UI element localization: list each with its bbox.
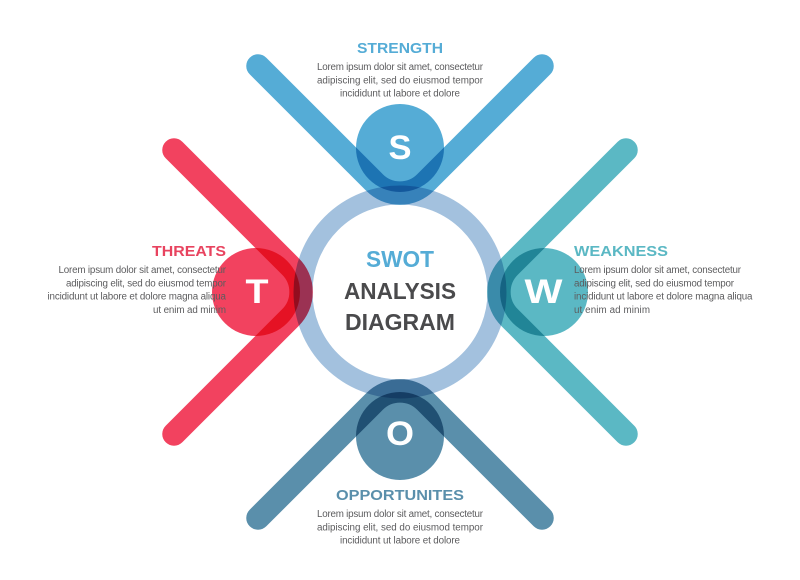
- opportunities V band: [258, 391, 542, 518]
- text block: strength: [317, 62, 484, 100]
- icon: letter T: T: [246, 273, 269, 311]
- title: analysis diagram: ANALYSIS: [344, 278, 456, 304]
- text block: threats: incididunt ut labore et dolore magna aliqua: [48, 292, 227, 303]
- threats circle: [212, 248, 300, 336]
- panel: opportunities graphic: [258, 391, 542, 518]
- opportunities circle: [356, 392, 444, 480]
- strength V band: [258, 66, 542, 193]
- text block: weakness: ut enim ad minim: [574, 305, 650, 316]
- threats V band: [174, 150, 301, 434]
- text block: strength: Lorem ipsum dolor sit amet, consectetur: [317, 62, 484, 73]
- heading: weakness: WEAKNESS: [574, 243, 668, 260]
- text block: weakness: incididunt ut labore et dolore magna aliqua: [574, 292, 753, 303]
- text block: strength: incididunt ut labore et dolore: [340, 88, 461, 100]
- text block: opportunities: adipiscing elit, sed do eiusmod tempor: [317, 522, 484, 534]
- text block: weakness: Lorem ipsum dolor sit amet, consectetur: [574, 265, 742, 276]
- heading: threats: THREATS: [152, 243, 226, 260]
- text block: threats: ut enim ad minim: [153, 305, 226, 316]
- title: analysis diagram: [344, 278, 456, 335]
- heading: SWOT: SWOT: [366, 246, 434, 272]
- icon: letter S: S: [388, 129, 412, 167]
- heading: opportunities: OPPORTUNITES: [336, 487, 464, 504]
- text block: opportunities: incididunt ut labore et dolore: [340, 536, 461, 546]
- heading: strength: STRENGTH: [357, 40, 443, 57]
- icon: letter O: O: [386, 415, 414, 453]
- text block: strength: adipiscing elit, sed do eiusmod tempor: [317, 76, 484, 86]
- icon: letter W: W: [524, 273, 564, 311]
- weakness V band: [499, 150, 626, 434]
- panel: strength graphic: [258, 66, 542, 193]
- weakness circle: [500, 248, 588, 336]
- text block: opportunities: [317, 509, 484, 546]
- text block: threats: adipiscing elit, sed do eiusmod tempor: [66, 278, 227, 289]
- central ring: [303, 195, 497, 389]
- text block: threats: [48, 265, 227, 316]
- strength circle: [356, 104, 444, 192]
- text block: opportunities: Lorem ipsum dolor sit amet, consectetur: [317, 509, 484, 520]
- text block: weakness: [574, 265, 753, 316]
- title: analysis diagram: DIAGRAM: [345, 309, 455, 335]
- panel: threats graphic: [174, 150, 301, 434]
- text block: weakness: adipiscing elit, sed do eiusmod tempor: [574, 278, 735, 289]
- text block: threats: Lorem ipsum dolor sit amet, consectetur: [58, 265, 227, 276]
- panel: weakness graphic: [499, 150, 626, 434]
